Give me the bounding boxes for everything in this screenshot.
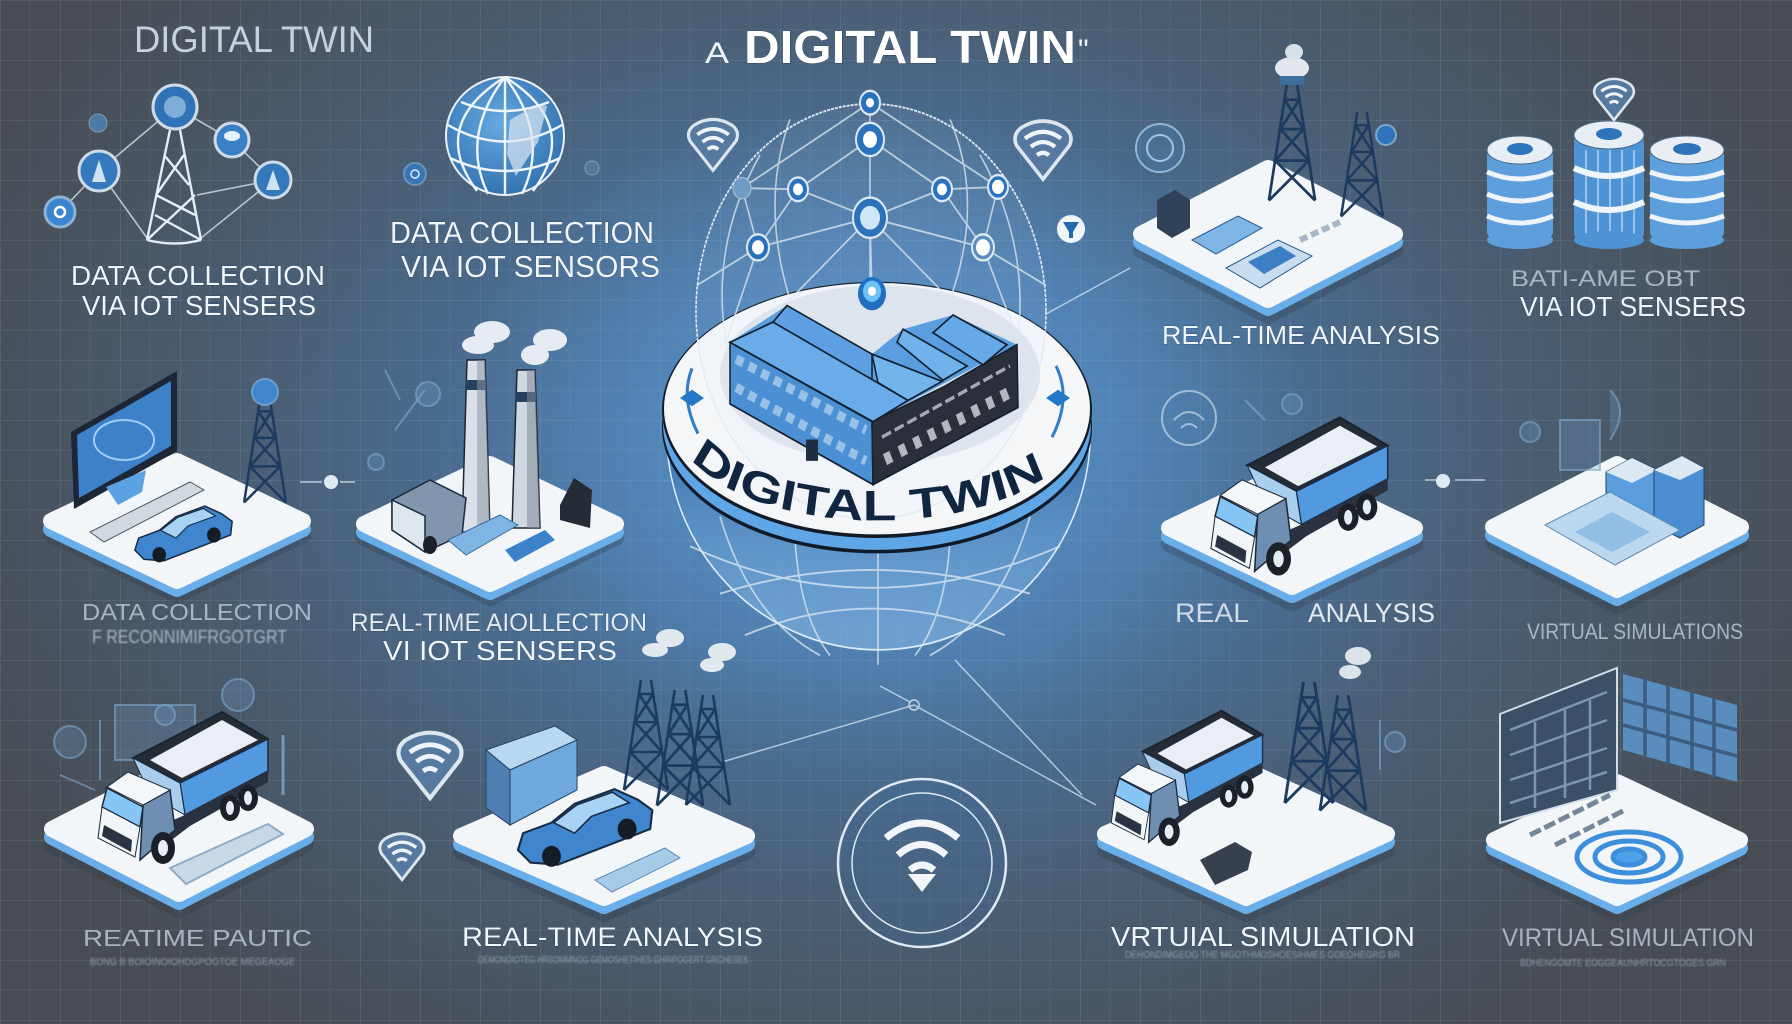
icon: wifi shield left [688,119,738,170]
label: realtime practice dim: REATIME PAUTIC [83,925,312,951]
database middle [1574,121,1644,249]
database left [1487,136,1553,249]
icon: control box [1157,190,1190,238]
panel: servers and simulation [1493,390,1741,606]
label: batiame via iot sensers [1511,266,1746,322]
icon: bench lines [1530,795,1625,845]
connector lines from hub [722,268,1130,805]
label: real-time aiollection via iot sensers: REAL-TIME AIOLLECTION [351,609,647,637]
icon: smoke [462,321,567,365]
ghost icons [1245,394,1302,420]
central hub: digital twin [662,90,1092,665]
label: real-time analysis bottom [462,922,763,966]
label: real analysis: REAL [1175,598,1249,628]
panel: chimneys and van [364,321,616,598]
icon: servers [1606,456,1704,544]
label: realtime practice dim [83,925,312,968]
icon: lattice towers [1285,682,1366,810]
label: virtual simulation far right [1502,924,1754,969]
arrow marker left [300,475,355,489]
icon: large screen [1500,668,1617,823]
icon: van [392,480,466,554]
panel: delivery truck [1162,391,1415,603]
ghost icons: chimney panel [368,370,440,470]
icon: document tiles [448,515,518,555]
panel: car, container and towers [461,629,747,914]
icon: blue data tiles [1623,674,1737,782]
label: batiame via iot sensers: VIA IOT SENSERS [1520,291,1746,322]
icon: location pin [1057,215,1085,243]
label: real-time aiollection via iot sensers [351,609,647,666]
icon: gauge tile [170,824,283,884]
icon: dark block [560,478,592,528]
icon: truck [1211,417,1388,576]
label: data collection dim: F RECONNIMIFRGOTGRT [92,627,287,647]
icon: sensor tower network [45,85,291,244]
label: data collection dim [82,599,312,647]
label: real-time analysis bottom: DEMONOIOTEG HRSOMMNOG GEMOSHETIHES GHRIPOGERT GRCHESES [478,955,748,966]
icon: bulldozer [1200,842,1252,885]
lower glass bowl [667,445,1090,665]
label: real-time aiollection via iot sensers: VI IOT SENSERS [383,635,617,666]
title: " [1078,34,1089,67]
label: real analysis: ANALYSIS [1308,598,1435,628]
panel: dump truck and sensors [52,679,306,910]
platform disc [662,282,1092,553]
icon: car [518,789,652,867]
label: data collection via iot sensors: VIA IOT SENSORS [401,249,660,284]
panel: simulation screens [1494,668,1740,914]
icon: truck [98,712,268,864]
label: realtime practice dim: BDNG B BOIOINOIOHDGPOGTOE MEGEAOGE [90,957,295,968]
label: virtual simulations dim: VIRTUAL SIMULATIONS [1527,619,1743,644]
icon: signal swirl [1577,832,1681,882]
icon: monitor [71,371,177,509]
label: real-time analysis top right: REAL-TIME ANALYSIS [1162,320,1440,350]
icon: dashboard tile [595,848,680,892]
icon: sensor ring [1136,124,1396,172]
icon: car [135,506,232,562]
ghost icons [1380,720,1405,770]
icon: smoke [642,629,736,672]
icon: tower [244,379,286,502]
icon: factory chimneys [462,360,540,532]
label: virtual simulation bottom: VRTUIAL SIMULATION [1111,921,1415,952]
network dome [696,91,1046,519]
title: DIGITAL TWIN [744,21,1076,73]
icon: globe [404,77,599,195]
icon: lattice tower [1341,112,1383,216]
factory building [730,306,1018,485]
icon: keyboard [90,482,204,542]
label: data collection via iot sensors [390,215,660,284]
secondary heading: digital twin: DIGITAL TWIN [134,19,374,60]
icon: dashboards [1192,216,1340,288]
icon: wifi pin large [398,733,462,798]
label: real analysis [1175,598,1435,628]
label: data collection via iot sensers: DATA COLLECTION [71,260,325,291]
ghost icons [54,679,283,795]
stamped label: digital twin: DIGITAL TWIN [693,438,1043,520]
icon: truck [1111,711,1263,846]
icon: wifi [1594,79,1634,120]
icon: wifi circle badge [838,779,1006,947]
icon: wifi shield right [1015,121,1071,179]
icon: wifi pin small [380,834,424,880]
title: A [705,37,729,70]
ghost icon: signal ring [1162,391,1216,445]
label: virtual simulation far right: VIRTUAL SIMULATION [1502,924,1754,952]
database right [1650,136,1724,249]
icon: water tower [1269,44,1315,200]
label: data collection via iot sensers: VIA IOT SENSERS [82,290,316,321]
label: batiame via iot sensers: BATI-AME OBT [1511,266,1700,291]
panel: truck and towers lower right [1105,647,1405,914]
arrow marker right [1425,474,1485,488]
panel: computer and car [51,371,303,595]
panel: real-time analysis top right [1136,44,1396,316]
label: data collection via iot sensers [71,260,325,321]
label: real-time analysis bottom: REAL-TIME ANALYSIS [462,922,763,952]
ghost icons [1520,390,1620,470]
icon: simulation floor map [1545,492,1680,565]
icon: lattice towers [624,680,730,806]
icon: database stacks [1487,79,1724,249]
icon: container [486,726,577,825]
label: data collection via iot sensors: DATA COLLECTION [390,215,654,250]
label: data collection dim: DATA COLLECTION [82,599,312,625]
icon: smoke [1339,647,1371,679]
label: virtual simulation bottom: DEHONDIMGEOG THE MGOTHMOSHOESIHMES GOEOHEGRG BR [1125,950,1400,961]
label: virtual simulation far right: BDHENGOMTE EOGGEAUNHRTOCGTOGES GRN [1520,958,1726,969]
